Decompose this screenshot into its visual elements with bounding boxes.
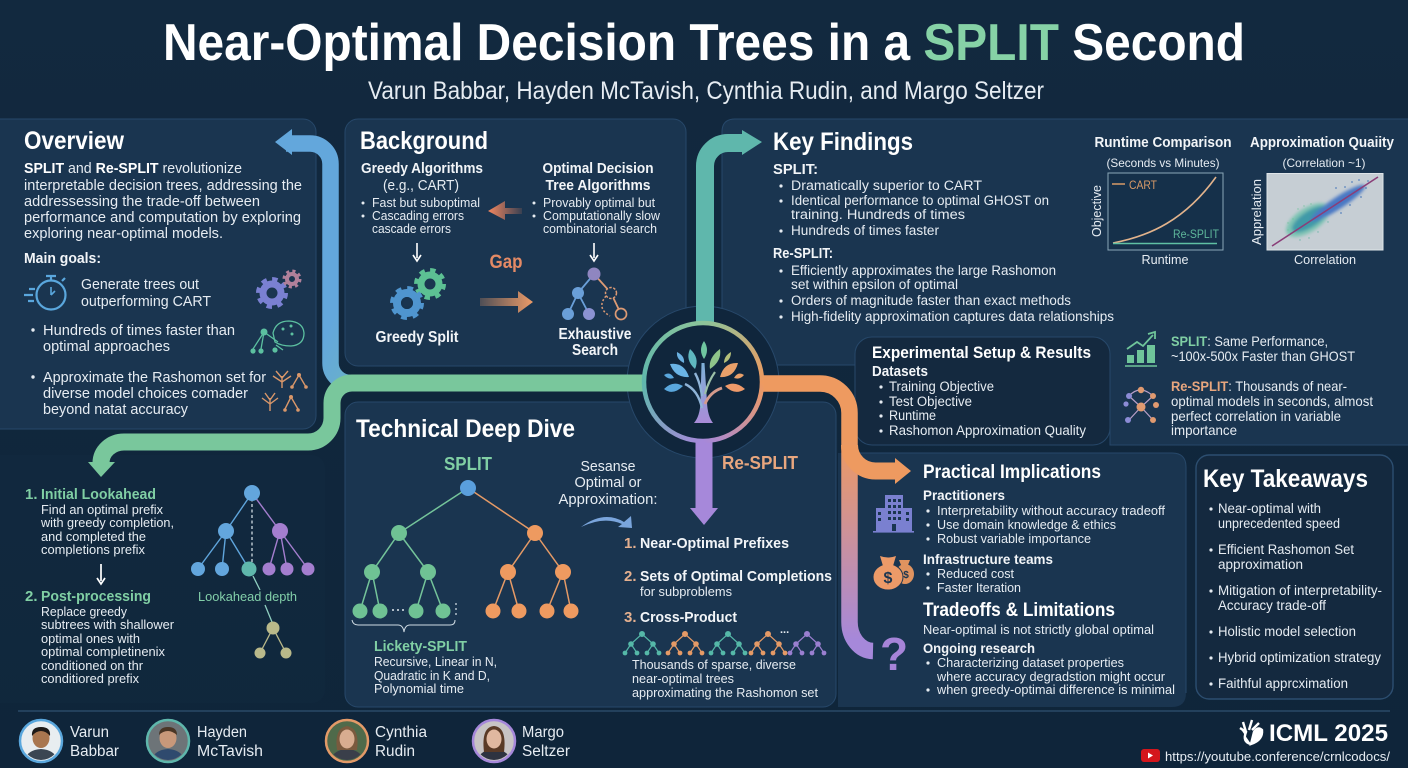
- Lickety-SPLIT text: Recursive, Linear in N,: [374, 654, 497, 669]
- approximation caption: Optimal or: [574, 475, 642, 491]
- Re-SPLIT numbered list: Cross-Product: [640, 609, 737, 626]
- greedy split label: Greedy Split: [376, 329, 459, 346]
- Re-SPLIT result: optimal models in seconds, almost: [1171, 393, 1373, 409]
- optimal algorithms column: Computationally slow: [543, 208, 661, 223]
- heading: experimental setup: Experimental Setup & Results: [872, 343, 1091, 362]
- SPLIT findings: [773, 162, 1049, 238]
- icon: stopwatch: [24, 276, 66, 310]
- datasets list: Test Objective: [889, 394, 972, 409]
- datasets list: [872, 364, 1086, 438]
- takeaways list: Accuracy trade-off: [1218, 598, 1326, 613]
- ongoing research list: Characterizing dataset properties: [937, 655, 1124, 670]
- practitioners list: Use domain knowledge & ethics: [937, 517, 1116, 532]
- Re-SPLIT result: Re-SPLIT: Thousands of near-: [1171, 378, 1347, 394]
- datasets list: Datasets: [872, 364, 928, 380]
- optimal algorithms column: Tree Algorithms: [546, 178, 650, 194]
- Re-SPLIT numbered list: Sets of Optimal Completions: [640, 568, 832, 585]
- heading: overview: Overview: [24, 127, 124, 155]
- author: Varun Babbar: Babbar: [70, 743, 119, 760]
- chart: approximation quality: Approximation Quaiity: [1250, 135, 1394, 151]
- author: Cynthia Rudin: Rudin: [375, 743, 415, 760]
- lookahead tree: [191, 485, 314, 658]
- ongoing research list: [923, 640, 1175, 697]
- icon: exhaustive search tree: [562, 268, 626, 320]
- Re-SPLIT numbered list: 1.: [624, 535, 637, 552]
- takeaways list: Hybrid optimization strategy: [1218, 650, 1381, 665]
- main goals label: Main goals:: [24, 251, 101, 267]
- takeaways list: Mitigation of interpretability-: [1218, 583, 1382, 598]
- icon: orange trees: [262, 371, 308, 412]
- Lickety-SPLIT text: [374, 638, 497, 696]
- datasets list: Training Objective: [889, 379, 994, 394]
- panel: initial lookahead (lower left): [0, 455, 325, 703]
- goal 2 text: [31, 323, 235, 355]
- icon: tree with cloud: [250, 321, 304, 354]
- greedy algorithms column: cascade errors: [372, 221, 451, 236]
- greedy algorithms column: Cascading errors: [372, 208, 464, 223]
- SPLIT findings: training. Hundreds of times: [791, 207, 965, 222]
- arrow: blue to overview: [275, 129, 650, 383]
- datasets list: Runtime: [889, 408, 936, 423]
- takeaways list: Near-optimal with: [1218, 501, 1321, 516]
- ongoing research list: where accuracy degradstion might occur: [936, 669, 1166, 684]
- greedy algorithms column: Greedy Algorithms: [361, 161, 483, 177]
- heading: key takeaways: Key Takeaways: [1203, 465, 1368, 493]
- footer: [18, 711, 1390, 764]
- takeaways list: Faithful apprcximation: [1218, 676, 1348, 691]
- central hub with tree logo: [644, 323, 762, 441]
- SPLIT tree diagram: [352, 480, 578, 632]
- panel: background: [345, 119, 686, 366]
- author: Cynthia Rudin: [326, 720, 427, 762]
- icon: greedy gears: [392, 270, 444, 318]
- heading: technical deep dive: Technical Deep Dive: [356, 415, 575, 443]
- arrow: curved to list: [581, 516, 632, 528]
- takeaways list: unprecedented speed: [1218, 516, 1340, 531]
- heading: practical implications: Practical Implications: [923, 462, 1101, 483]
- practitioners list: Practitioners: [923, 487, 1005, 503]
- arrow: step 1 to 2: [97, 564, 105, 584]
- greedy algorithms column: Fast but suboptimal: [372, 195, 480, 210]
- Re-SPLIT numbered list: for subproblems: [640, 584, 732, 599]
- arrow: greedy down: [413, 243, 421, 261]
- step 2: conditiored prefix: [41, 671, 139, 686]
- ICML logo: ICML 2025: [1269, 720, 1388, 747]
- exhaustive search label: Exhaustive: [558, 326, 632, 343]
- SPLIT label: SPLIT: [444, 454, 492, 474]
- step 1: [25, 486, 174, 557]
- tradeoffs sentence: Near-optimal is not strictly global optimal: [923, 622, 1154, 637]
- step 1: and completed the: [41, 529, 146, 544]
- practitioners list: Interpretability without accuracy tradeoff: [937, 503, 1165, 518]
- chart: approximation quality: (Correlation ~1): [1282, 156, 1366, 170]
- ongoing research list: when greedy-optimai difference is minimal: [936, 682, 1175, 697]
- panel: technical deep dive: [345, 402, 836, 707]
- panel: experimental setup: [855, 337, 1110, 445]
- Lickety-SPLIT text: Lickety-SPLIT: [374, 638, 467, 655]
- SPLIT result: [1171, 333, 1355, 364]
- optimal algorithms column: combinatorial search: [543, 221, 657, 236]
- chart: runtime comparison: Objective: [1090, 185, 1104, 237]
- arrow: teal to key findings: [705, 130, 762, 330]
- panel: key findings: [722, 119, 1408, 445]
- icon: money bags: $: [903, 570, 909, 581]
- Re-SPLIT numbered list: Near-Optimal Prefixes: [640, 535, 789, 552]
- step 2: subtrees with shallower: [41, 617, 175, 632]
- Re-SPLIT findings: set within epsilon of optimal: [791, 277, 958, 292]
- infrastructure teams list: Infrastructure teams: [923, 551, 1053, 567]
- optimal algorithms column: Provably optimal but: [543, 195, 655, 210]
- step 2: Replace greedy: [41, 604, 127, 619]
- heading: key findings: Key Findings: [773, 128, 913, 156]
- goal 1 text: Generate trees out: [81, 277, 199, 293]
- icon: bars growth: [1125, 332, 1157, 366]
- Re-SPLIT findings: Re-SPLIT:: [773, 246, 833, 262]
- chart: approximation quality: [1250, 135, 1394, 267]
- panel: practical implications: [838, 453, 1186, 707]
- author: Hayden McTavish: [147, 720, 263, 762]
- chart: runtime comparison: [1090, 135, 1232, 267]
- Re-SPLIT numbered list: [624, 535, 832, 626]
- thousands caption: near-optimal trees: [632, 671, 734, 686]
- Re-SPLIT findings: High-fidelity approximation captures data relationships: [791, 309, 1114, 324]
- chart: approximation quality: Correlation: [1294, 253, 1356, 267]
- infrastructure teams list: Faster Iteration: [937, 580, 1021, 595]
- Re-SPLIT numbered list: 2.: [624, 568, 637, 585]
- datasets list: Rashomon Approximation Quality: [889, 423, 1086, 438]
- step 2: optimal completinenix: [41, 644, 165, 659]
- SPLIT findings: Hundreds of times faster: [791, 223, 939, 238]
- chart: runtime comparison: Runtime Comparison: [1094, 135, 1232, 151]
- SPLIT result: SPLIT: Same Performance,: [1171, 333, 1328, 349]
- overview paragraph: performance and computation by exploring: [24, 210, 301, 226]
- takeaways list: approximation: [1218, 557, 1303, 572]
- arrow: orange to practical implications and tradeoffs: [758, 384, 911, 651]
- arrow: optimal down: [590, 243, 598, 261]
- author: Margo Seltzer: Margo: [522, 724, 564, 741]
- central hub halo: [627, 306, 779, 458]
- panel: overview: [0, 119, 316, 429]
- Re-SPLIT findings: [773, 246, 1114, 324]
- overview paragraph: addressessing the trade-off between: [24, 194, 260, 210]
- practitioners list: [923, 487, 1165, 546]
- takeaways list: [1209, 501, 1382, 691]
- overview paragraph: SPLIT and Re-SPLIT revolutionize: [24, 161, 242, 177]
- infrastructure teams list: Reduced cost: [937, 566, 1014, 581]
- optimal algorithms column: Optimal Decision: [542, 161, 654, 177]
- Re-SPLIT result: perfect correlation in variable: [1171, 408, 1341, 424]
- step 1: 1.: [25, 486, 38, 503]
- thousands caption: [632, 657, 818, 700]
- goal 3 text: beyond natat accuracy: [43, 402, 189, 418]
- author: Margo Seltzer: Seltzer: [522, 743, 570, 760]
- small trees row: [623, 624, 826, 655]
- step 2: optimal ones with: [41, 631, 140, 646]
- authors subtitle: Varun Babbar, Hayden McTavish, Cynthia Rudin, and Margo Seltzer: [368, 77, 1044, 105]
- goal 2 text: Hundreds of times faster than: [43, 323, 235, 339]
- overview paragraph: interpretable decision trees, addressing the: [24, 178, 302, 194]
- SPLIT result: ~100x-500x Faster than GHOST: [1171, 348, 1355, 364]
- small trees row: ...: [780, 624, 789, 636]
- step 1: completions prefix: [41, 542, 145, 557]
- infrastructure teams list: [923, 551, 1053, 595]
- goal 3 text: diverse model choices comader: [43, 386, 248, 402]
- greedy algorithms column: (e.g., CART): [383, 178, 459, 194]
- takeaways list: Holistic model selection: [1218, 624, 1356, 639]
- goal 1 text: outperforming CART: [81, 294, 211, 310]
- goal 3 text: [31, 370, 266, 418]
- author: Cynthia Rudin: Cynthia: [375, 724, 427, 741]
- approximation caption: Approximation:: [558, 492, 658, 508]
- takeaways list: Efficient Rashomon Set: [1218, 542, 1354, 557]
- ongoing research list: Ongoing research: [923, 640, 1035, 656]
- SPLIT findings: Identical performance to optimal GHOST on: [791, 193, 1049, 208]
- SPLIT findings: Dramatically superior to CART: [791, 178, 982, 193]
- icon: network: [1123, 387, 1159, 423]
- author: Varun Babbar: [20, 720, 119, 762]
- gap label: Gap: [490, 252, 522, 273]
- author: Hayden McTavish: McTavish: [197, 743, 263, 760]
- optimal algorithms column: [532, 161, 661, 236]
- thousands caption: approximating the Rashomon set: [632, 685, 818, 700]
- goal 3 text: Approximate the Rashomon set for: [43, 370, 266, 386]
- SPLIT findings: SPLIT:: [773, 162, 818, 178]
- heading: tradeoffs: Tradeoffs & Limitations: [923, 600, 1115, 621]
- overview paragraph: exploring near-optimal models.: [24, 226, 223, 242]
- Re-SPLIT numbered list: 3.: [624, 609, 637, 626]
- YouTube link: https://youtube.conference/crnlcodocs/: [1165, 749, 1390, 764]
- overview paragraph: [24, 161, 302, 242]
- Re-SPLIT label: Re-SPLIT: [722, 453, 798, 473]
- title: Near-Optimal Decision Trees in a SPLIT Second: [163, 14, 1245, 72]
- practitioners list: Robust variable importance: [937, 531, 1091, 546]
- heading: background: Background: [360, 127, 488, 155]
- chart: runtime comparison: CART: [1129, 178, 1158, 192]
- icon: tree logo: [664, 341, 745, 423]
- step 1: Find an optimal prefix: [41, 502, 163, 517]
- exhaustive search label: Search: [572, 342, 618, 359]
- step 1: with greedy completion,: [40, 515, 174, 530]
- step 2: 2.: [25, 588, 38, 605]
- lookahead tree: Lookahead depth: [198, 589, 297, 604]
- author: Varun Babbar: Varun: [70, 724, 109, 741]
- icon: money bags: $: [884, 570, 893, 587]
- arrow: gap right: [480, 291, 533, 313]
- step 1: Initial Lookahead: [41, 486, 156, 503]
- step 2: Post-processing: [41, 588, 151, 605]
- icon: building: [873, 495, 914, 533]
- arrow: green to lookahead: [88, 383, 650, 477]
- icon: question mark: ?: [880, 628, 908, 680]
- author: Hayden McTavish: Hayden: [197, 724, 247, 741]
- Re-SPLIT result: importance: [1171, 422, 1237, 438]
- thousands caption: Thousands of sparse, diverse: [632, 657, 796, 672]
- approximation caption: Sesanse: [580, 459, 636, 475]
- panel: key takeaways: [1196, 455, 1393, 699]
- greedy algorithms column: [361, 161, 483, 236]
- approximation caption: [558, 459, 658, 508]
- Re-SPLIT findings: Efficiently approximates the large Rashomon: [791, 263, 1056, 278]
- step 2: [25, 588, 175, 686]
- goal 1 text: [81, 277, 211, 310]
- chart: runtime comparison: (Seconds vs Minutes): [1106, 156, 1220, 170]
- chart: approximation quality: Apprelation: [1250, 179, 1264, 245]
- Re-SPLIT result: [1171, 378, 1373, 438]
- step 2: conditioned on thr: [41, 658, 144, 673]
- icon: money bags: [873, 556, 914, 590]
- icon: gears: [258, 271, 300, 307]
- goal 2 text: optimal approaches: [43, 339, 170, 355]
- author: Margo Seltzer: [473, 720, 570, 762]
- chart: runtime comparison: Re-SPLIT: [1173, 227, 1220, 241]
- arrow: optimal to greedy: [488, 201, 522, 220]
- Re-SPLIT findings: Orders of magnitude faster than exact methods: [791, 293, 1071, 308]
- chart: runtime comparison: Runtime: [1142, 253, 1189, 267]
- exhaustive search label: [558, 326, 632, 359]
- Lickety-SPLIT text: Polynomial time: [374, 681, 464, 696]
- Lickety-SPLIT text: Quadratic in K and D,: [374, 668, 490, 683]
- arrow: purple to Re-SPLIT: [690, 438, 718, 525]
